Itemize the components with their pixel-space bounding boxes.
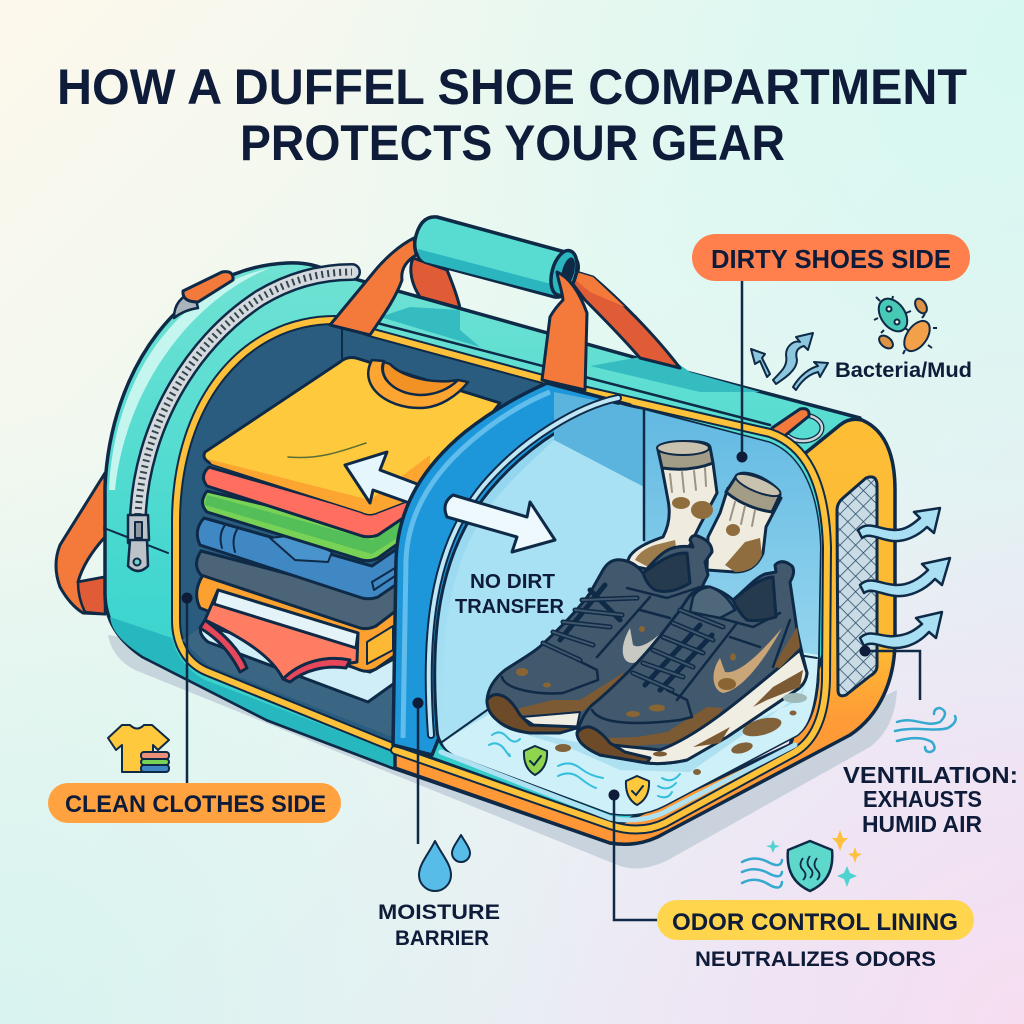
trim arch [429, 398, 618, 735]
dark interior [176, 320, 600, 745]
right shoe tongue [690, 587, 735, 618]
title: PROTECTS YOUR GEAR [240, 115, 785, 171]
shoulder strap left [56, 473, 105, 614]
handle strap back right [560, 267, 680, 368]
top band shading [380, 307, 760, 392]
left shoe toe cap [487, 695, 580, 733]
callout: odor control lining: NEUTRALIZES ODORS [695, 948, 936, 971]
orange shirt [197, 575, 410, 671]
callout: odor control lining: ODOR CONTROL LINING [672, 909, 958, 936]
compartment floor [442, 625, 818, 814]
left shoe midsole [522, 712, 580, 727]
label: no dirt transfer: NO DIRT [470, 571, 555, 593]
left arrow: no transfer [345, 452, 425, 505]
lower body shade [110, 617, 393, 767]
dark grey layer [196, 551, 410, 629]
top carry handle [330, 217, 680, 390]
corner line [643, 410, 645, 540]
icon: wind [895, 708, 956, 752]
title [57, 59, 967, 171]
underwear [205, 590, 358, 679]
floor trim [441, 745, 795, 820]
red layer [203, 467, 415, 537]
callout: ventilation: EXHAUSTS [863, 786, 982, 812]
zipper [138, 272, 352, 515]
callout: moisture barrier [378, 698, 500, 950]
seam line [104, 528, 168, 553]
bag body teal [105, 263, 880, 843]
callout: moisture barrier: BARRIER [395, 927, 489, 950]
exhaust arrows [858, 508, 950, 648]
left collar [643, 553, 690, 591]
body highlight [109, 268, 270, 490]
left shoe [487, 536, 712, 733]
mud splatter [555, 693, 807, 775]
blue jeans [197, 518, 410, 599]
callout: dirty shoes side: DIRTY SHOES SIDE [711, 244, 951, 274]
duffel bag [56, 263, 880, 843]
yellow top shirt [204, 358, 500, 514]
label: no dirt transfer [455, 571, 565, 618]
top stripe [377, 323, 770, 425]
floor shadow under shoes [495, 670, 810, 772]
yellow orange end panel [395, 419, 895, 844]
handle strap front right [542, 272, 587, 390]
green shield [524, 746, 547, 775]
handle grip [415, 217, 582, 298]
heel mud [773, 627, 800, 668]
right shoe mud band [608, 707, 723, 747]
right end of bag [395, 391, 895, 844]
ring and tab right [772, 409, 822, 441]
mesh vent [837, 477, 877, 696]
icon: t-shirt and folded clothes [108, 725, 169, 772]
sock left [628, 441, 717, 572]
right shoe toe cap [577, 727, 650, 763]
left shoe mud band [513, 673, 625, 715]
zipper pull [128, 515, 149, 571]
callout: dirty shoes side [692, 234, 970, 462]
collar [368, 360, 468, 408]
right laces [633, 610, 723, 690]
callout: odor control lining [608, 790, 974, 971]
callout: ventilation [843, 646, 1018, 837]
shoe compartment [429, 392, 820, 820]
rising arrows [751, 333, 828, 390]
callout: ventilation: VENTILATION: [843, 762, 1018, 788]
shirt crease [288, 443, 366, 458]
upper dark wall [554, 392, 644, 487]
callout: moisture barrier: MOISTURE [378, 901, 500, 924]
label: no dirt transfer: TRANSFER [455, 596, 565, 618]
title: HOW A DUFFEL SHOE COMPARTMENT [57, 59, 967, 115]
right collar [733, 577, 776, 621]
socks [628, 441, 783, 572]
callout: clean clothes side [48, 592, 341, 823]
divider wall [393, 383, 630, 755]
bacteria and mud: Bacteria/Mud [835, 359, 972, 382]
floor [182, 625, 400, 740]
handle strap left [330, 238, 416, 335]
sock right [707, 470, 783, 572]
ring and tab left [174, 272, 233, 318]
odor lining waves and shields [489, 732, 680, 805]
bacteria and mud [751, 293, 972, 390]
callout: ventilation: HUMID AIR [862, 811, 982, 837]
folded clothes stack [196, 358, 500, 702]
icon: water drops [419, 835, 470, 891]
microbes [873, 293, 937, 356]
divider side highlight [403, 392, 550, 738]
callout: clean clothes side: CLEAN CLOTHES SIDE [65, 791, 326, 818]
light side wall [444, 440, 644, 735]
yellow shield [626, 776, 649, 805]
right shoe [577, 562, 807, 764]
right shoe sole [612, 650, 807, 764]
compartment back wall [435, 403, 820, 814]
yellow trim [395, 391, 827, 830]
left laces [543, 585, 637, 660]
dirty sneakers [487, 536, 807, 764]
interior back wall [341, 325, 343, 358]
icon: odor shield with sparkles [742, 830, 862, 891]
right arrow: no dirt transfer [445, 495, 555, 552]
white base layer [200, 625, 410, 702]
bag shadow [108, 635, 897, 868]
right swoosh [714, 628, 782, 693]
handle strap back left [411, 258, 460, 308]
green layer [202, 491, 410, 561]
left swoosh [623, 626, 668, 663]
yellow trim left [176, 320, 587, 748]
